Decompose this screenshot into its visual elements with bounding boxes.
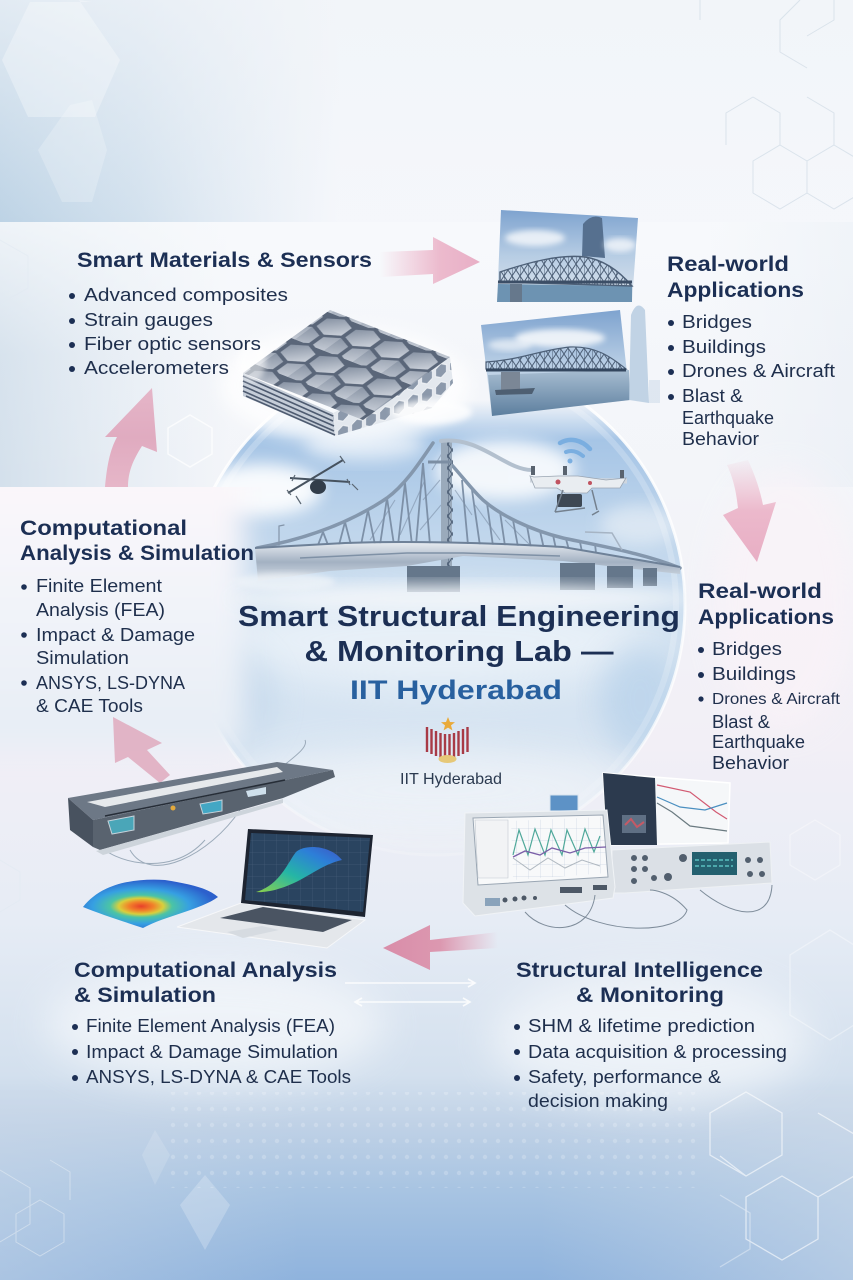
bullet list: Drones & Aircraft [712, 691, 841, 708]
photo: bridge with tower, top [497, 210, 638, 302]
bullet list: ANSYS, LS-DYNA & CAE Tools [86, 1067, 351, 1087]
heading: Computational Analysis [74, 959, 337, 982]
bullet list: Blast & [682, 386, 743, 406]
laptop screen [241, 829, 373, 917]
simulation contour [256, 847, 342, 892]
heading: Real-world [667, 253, 789, 276]
bullet list [21, 576, 195, 716]
circular disc with sky behind bridge [213, 404, 686, 786]
image: laptop with simulation [177, 829, 373, 948]
bullet list: Behavior [682, 429, 759, 449]
panel: computational analysis bottom [72, 959, 351, 1087]
image: small blue display on oscilloscope [550, 795, 578, 811]
image: rear instrument with green display [612, 842, 772, 893]
bullet list [698, 639, 841, 773]
bullet list: Earthquake [682, 408, 774, 428]
rig cables [100, 740, 306, 865]
mist [225, 585, 695, 611]
truss posts [318, 445, 596, 553]
bullet list: Buildings [712, 664, 796, 684]
bullet list: Finite Element Analysis (FEA) [86, 1016, 335, 1036]
bullet list: SHM & lifetime prediction [528, 1016, 755, 1036]
image: main suspension bridge [225, 440, 695, 611]
bullet list: Impact & Damage [36, 625, 195, 645]
panel: real-world applications lower [698, 580, 841, 773]
arrow: applications top to lower applications [723, 460, 776, 562]
honeycomb top surface [243, 310, 450, 420]
heading: Computational [20, 517, 187, 540]
panel: structural intelligence and monitoring: & Monitoring [576, 984, 724, 1007]
bullet list: Impact & Damage Simulation [86, 1042, 338, 1062]
probe cables [525, 885, 772, 928]
arrow: materials to applications [380, 237, 480, 284]
thin white guide arrows [345, 979, 475, 1006]
bullet list: Drones & Aircraft [682, 361, 835, 381]
bullet list: Fiber optic sensors [84, 334, 261, 354]
logo caption: IIT Hyderabad [400, 771, 502, 788]
image: front oscilloscope [463, 810, 772, 928]
deck [255, 543, 680, 581]
bullet list: Buildings [682, 337, 766, 357]
bullet list: & CAE Tools [36, 696, 143, 716]
bullet list [514, 1016, 787, 1111]
tower [441, 441, 452, 573]
arrow: simulation up to materials [105, 388, 157, 487]
bullet list: ANSYS, LS-DYNA [36, 673, 185, 693]
decorative panel light band: left [0, 460, 245, 750]
bullet list [72, 1016, 351, 1087]
heading: Smart Materials & Sensors [77, 249, 372, 272]
panel: smart materials and sensors [69, 249, 372, 378]
arrow: monitoring back to simulation [383, 925, 498, 970]
bullet list: Accelerometers [84, 358, 229, 378]
center title: Smart Structural Engineering [238, 601, 680, 633]
panel: real-world applications upper [667, 253, 835, 449]
lamp [279, 525, 284, 545]
bullet list: Safety, performance & [528, 1067, 721, 1087]
bullet list [69, 285, 288, 378]
center title: & Monitoring Lab — [304, 636, 614, 668]
bullet list: Earthquake [712, 732, 805, 752]
image: skyscraper beside photo [629, 306, 660, 403]
bullet list: Finite Element [36, 576, 162, 596]
laminated edge [243, 373, 335, 436]
heading: Structural Intelligence [516, 959, 763, 982]
image: monitor with plotted curves [603, 773, 730, 845]
decorative glow right [715, 470, 853, 730]
bullet list: Advanced composites [84, 285, 288, 305]
center title [238, 601, 680, 705]
bullet list [668, 312, 835, 449]
center title: IIT Hyderabad [350, 675, 562, 705]
main cables [257, 443, 680, 568]
cable tube to drone [441, 440, 532, 470]
image: structural test rig with sensors [68, 740, 335, 865]
icon: left drone [287, 456, 358, 504]
bullet list: Data acquisition & processing [528, 1042, 787, 1062]
arrow: simulation upward left [113, 717, 170, 783]
panel: structural intelligence and monitoring [514, 959, 787, 1111]
decorative hex glyph left [168, 415, 212, 467]
honeycomb side wall [333, 357, 453, 436]
panel: computational analysis left: Analysis & Simulation [20, 542, 254, 565]
bullet list: Simulation [36, 648, 129, 668]
icon: right drone with wifi [530, 440, 627, 515]
bullet list: Behavior [712, 753, 789, 773]
photo: bridge over river, lower [481, 310, 630, 416]
panel: real-world applications upper: Applications [667, 279, 804, 302]
bullet list: Analysis (FEA) [36, 600, 165, 620]
bullet list: Strain gauges [84, 310, 213, 330]
panel: computational analysis bottom: & Simulation [74, 984, 216, 1007]
piers [407, 563, 657, 592]
far end truss [585, 532, 622, 550]
heading: Real-world [698, 580, 822, 603]
image: FEA deformed mesh heatmap [83, 880, 218, 928]
panel: real-world applications lower: Applications [698, 606, 834, 629]
icon: wifi signal [560, 440, 590, 464]
image: honeycomb smart material panel [220, 310, 472, 443]
bullet list: decision making [528, 1091, 668, 1111]
logo: IIT Hyderabad [400, 717, 502, 788]
bullet list: Blast & [712, 712, 770, 732]
laptop base [177, 903, 365, 948]
bullet list: Bridges [712, 639, 782, 659]
soft glow behind bottom text [45, 965, 810, 1105]
panel: computational analysis left [20, 517, 254, 716]
bullet list: Bridges [682, 312, 752, 332]
